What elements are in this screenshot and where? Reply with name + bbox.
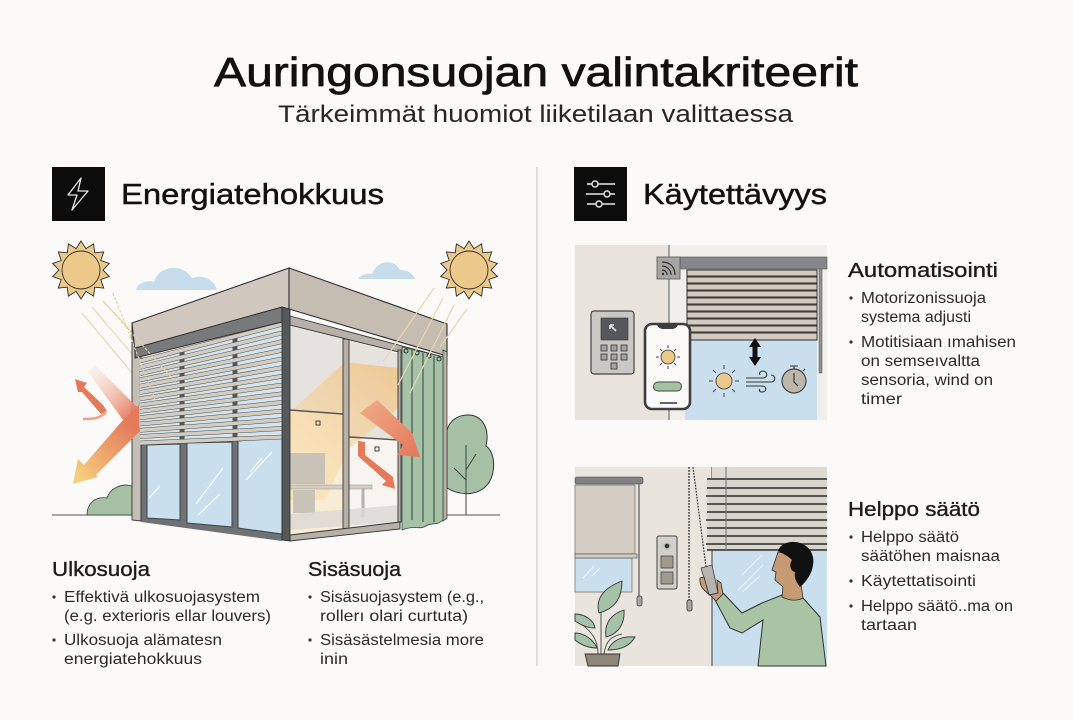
shirt bbox=[715, 593, 826, 666]
list: Ulkosuoja bbox=[52, 589, 271, 668]
list: Helppo säätö: Helppo säätö..ma on bbox=[861, 598, 1013, 615]
horizontal blinds bbox=[706, 467, 827, 550]
smartphone bbox=[645, 324, 690, 409]
wind icon bbox=[746, 371, 775, 392]
motor roller bar bbox=[680, 257, 827, 269]
roof bbox=[132, 268, 289, 352]
title: Auringonsuojan valintakriteerit bbox=[214, 49, 859, 95]
list: Automatisointi: systema adjusti bbox=[861, 309, 971, 326]
cassette bbox=[135, 307, 282, 358]
right window bbox=[712, 551, 827, 666]
glass glints bbox=[149, 452, 272, 515]
list: Helppo säätö bbox=[849, 529, 1013, 634]
up-down arrow bbox=[749, 338, 761, 366]
right wing post bbox=[443, 350, 447, 521]
curtain bbox=[402, 347, 443, 530]
sun icon bbox=[709, 365, 739, 397]
desk bbox=[290, 453, 372, 517]
left wall beams bbox=[82, 301, 132, 373]
beams over louvers bbox=[103, 293, 178, 407]
list: Automatisointi: Motorizonissuoja bbox=[861, 290, 986, 307]
list: Automatisointi: on semseıvaltta bbox=[861, 353, 980, 370]
list: Automatisointi: sensoria, wind on bbox=[861, 372, 993, 389]
bush bbox=[87, 485, 132, 515]
side rod bbox=[819, 269, 822, 373]
remote bbox=[701, 565, 718, 595]
sun left bbox=[53, 241, 109, 299]
hair bbox=[778, 542, 813, 587]
subheading: Automatisointi: Automatisointi bbox=[848, 260, 998, 282]
list: Ulkosuoja: Effektivä ulkosuojasystem bbox=[64, 589, 260, 606]
right frame bbox=[290, 316, 447, 541]
chain cords bbox=[688, 467, 690, 600]
left window bbox=[575, 558, 632, 592]
head and neck bbox=[772, 552, 803, 600]
right wing interior bbox=[290, 325, 400, 535]
sun beam interior bbox=[290, 362, 398, 500]
blind top bbox=[712, 467, 827, 479]
list: Sisäsuoja: Sisäsuojasystem (e.g., bbox=[320, 589, 484, 606]
list: Automatisointi: Motitisiaan ımahisen bbox=[861, 334, 1016, 351]
icon: lightning bolt bbox=[52, 167, 105, 221]
list: Helppo säätö: säätöhen maisnaa bbox=[861, 548, 1000, 565]
tree bbox=[447, 415, 494, 515]
subheading: Helppo säätö: Helppo säätö bbox=[848, 499, 980, 521]
hand bbox=[700, 577, 723, 601]
reflected arrows bbox=[73, 365, 140, 484]
rails with lamps bbox=[290, 410, 399, 440]
beams right bbox=[383, 288, 467, 393]
list: Sisäsuoja: rollerı olari curtuta) bbox=[320, 608, 468, 625]
building illustration bbox=[52, 241, 500, 541]
list: Sisäsuoja: Sisäsästelmesia more bbox=[320, 632, 484, 649]
icon: sliders bbox=[574, 167, 627, 221]
roller blind bbox=[575, 477, 643, 606]
heading: Käytettävyys: Käytettävyys bbox=[643, 179, 827, 211]
timer icon bbox=[782, 366, 806, 393]
list: Ulkosuoja: energiatehokkuus bbox=[64, 651, 202, 668]
arrow: transmitted heat, large bbox=[360, 400, 420, 457]
building left post bbox=[132, 323, 141, 521]
person bbox=[700, 542, 826, 666]
potted plant bbox=[575, 581, 635, 666]
subtitle: Tärkeimmät huomiot liiketilaan valittaessa bbox=[278, 101, 794, 128]
list: Automatisointi: timer bbox=[861, 391, 902, 408]
list: Helppo säätö: tartaan bbox=[861, 617, 917, 634]
wifi box bbox=[657, 257, 680, 279]
list: Helppo säätö: Helppo säätö bbox=[861, 529, 959, 546]
list: Ulkosuoja: (e.g. exterioris ellar louvers) bbox=[64, 608, 271, 625]
panel: automation illustration bbox=[575, 245, 827, 420]
clouds bbox=[136, 268, 217, 290]
frame behind windows bbox=[141, 437, 282, 541]
exterior louvers bbox=[140, 322, 283, 443]
wall switch bbox=[657, 536, 677, 589]
window bbox=[685, 340, 817, 420]
list: Automatisointi bbox=[849, 290, 1016, 408]
blind slats bbox=[687, 270, 817, 340]
sun right bbox=[441, 241, 497, 299]
keypad bbox=[591, 311, 634, 374]
heading: Energiatehokkuus: Energiatehokkuus bbox=[121, 179, 384, 211]
list: Sisäsuoja bbox=[308, 589, 484, 668]
corner post bbox=[282, 307, 290, 541]
arrow: transmitted heat, small bbox=[358, 441, 395, 489]
list: Sisäsuoja: inin bbox=[320, 651, 348, 668]
list: Ulkosuoja: Ulkosuoja alämatesn bbox=[64, 632, 222, 649]
subheading: Ulkosuoja: Ulkosuoja bbox=[52, 559, 151, 581]
ground line bbox=[52, 514, 500, 516]
list: Helppo säätö: Käytettatisointi bbox=[861, 573, 976, 590]
windows bbox=[147, 437, 282, 534]
panel: easy adjustment illustration bbox=[575, 467, 827, 666]
subheading: Sisäsuoja: Sisäsuoja bbox=[308, 559, 402, 581]
